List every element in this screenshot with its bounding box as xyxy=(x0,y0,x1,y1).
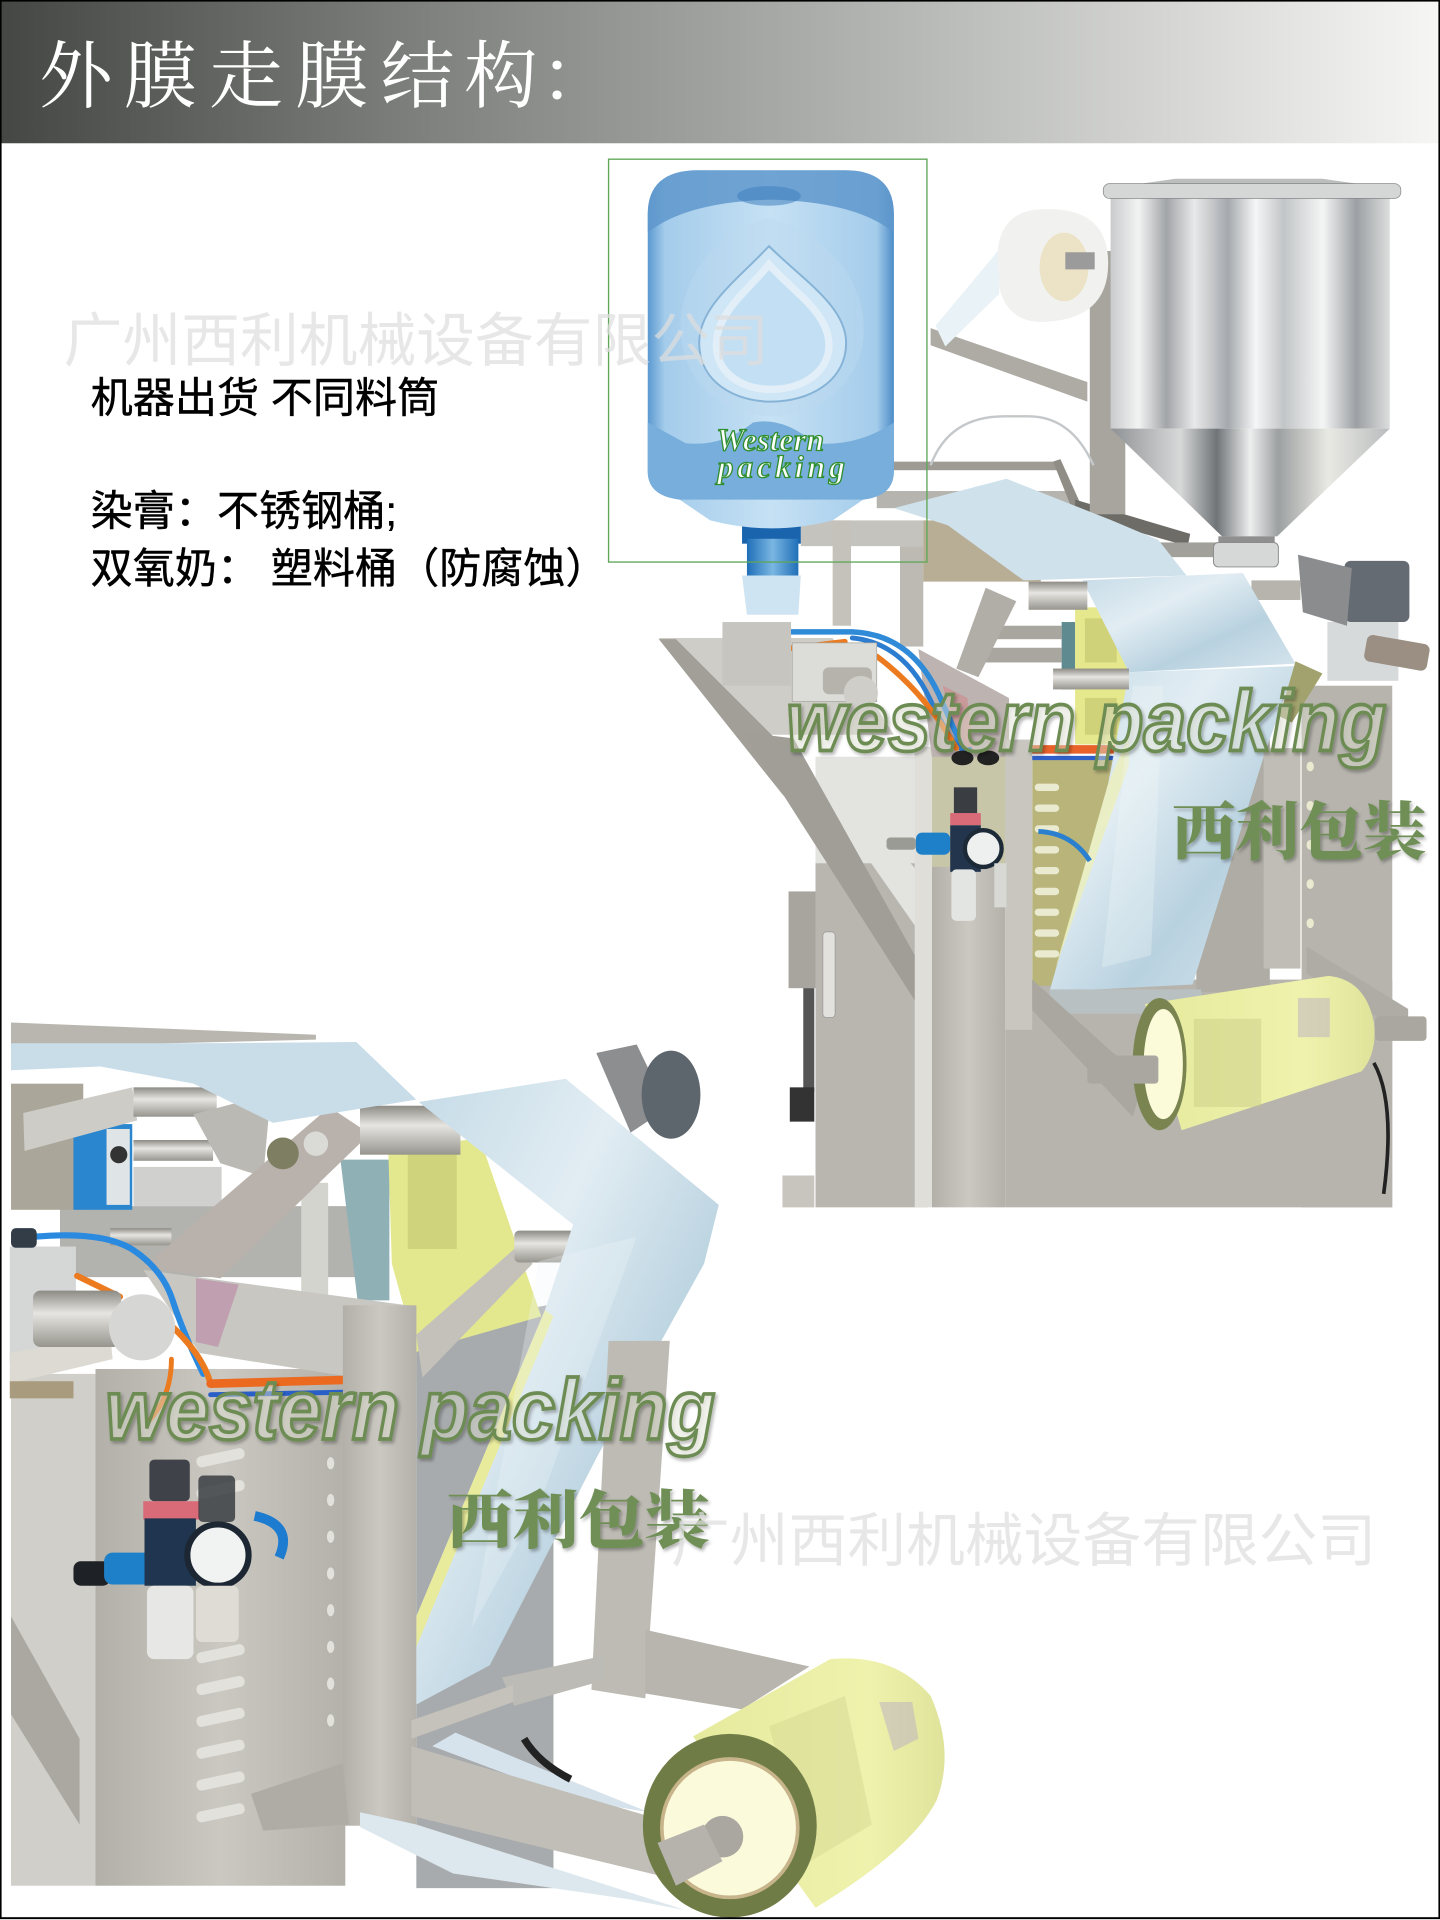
tray arms xyxy=(1032,947,1408,1194)
text block: barrel notes xyxy=(91,375,608,592)
bottle brand text xyxy=(715,423,845,485)
bottle highlight frame xyxy=(609,159,927,562)
printed film roll xyxy=(1087,976,1427,1130)
bottle body xyxy=(648,170,894,528)
watermark: 西利包装 bottom: 西利包装 xyxy=(447,1486,710,1557)
close-up cylinder block xyxy=(10,1247,113,1398)
upper film path frame xyxy=(801,251,1273,689)
top film roll xyxy=(936,209,1108,347)
close-up cabinet panels xyxy=(11,1022,553,1888)
close-up motor xyxy=(596,1044,700,1139)
header banner xyxy=(1,1,1440,143)
strap and rods xyxy=(23,1087,269,1245)
close-up air pipes xyxy=(34,1235,343,1420)
close-up printed roll xyxy=(643,1658,945,1918)
bottle brand text: Western xyxy=(716,423,824,458)
watermark: 西利包装 top: 西利包装 xyxy=(1172,798,1427,869)
note line 3: 双氧奶： 塑料桶（防腐蚀） xyxy=(91,545,608,592)
air pipes xyxy=(765,632,1113,758)
note line 1: 机器出货 不同料筒 xyxy=(91,375,439,422)
timer box xyxy=(73,1124,132,1210)
watermark: western packing bottom: western packing xyxy=(105,1362,715,1458)
bottle lower band xyxy=(648,421,894,500)
filter regulator xyxy=(887,787,1090,921)
black pipe fittings xyxy=(951,751,999,765)
yellow label on film xyxy=(388,1139,541,1352)
close-up plate and roller xyxy=(143,1106,582,1378)
watermark: company name top: 广州西利机械设备有限公司 xyxy=(64,309,769,374)
teal film and slot bracket xyxy=(301,1160,389,1300)
close-up posts and bars xyxy=(251,1305,809,1910)
close-up air cylinder xyxy=(11,1228,175,1360)
panel slots xyxy=(195,1447,334,1823)
machine photo: close-up of film path xyxy=(10,1022,945,1918)
water bottle barrel xyxy=(648,170,894,615)
bottle top dark spot xyxy=(737,186,801,206)
watermark: company name bottom: 广州西利机械设备有限公司 xyxy=(671,1509,1376,1574)
watermark: western packing top: western packing xyxy=(786,674,1386,770)
teardrop emblem xyxy=(680,218,864,416)
close-up film web xyxy=(11,1042,719,1704)
close-up horizontal bar xyxy=(143,1270,416,1387)
bottle top band xyxy=(648,170,894,233)
air cylinder unit on table xyxy=(722,622,878,710)
panel slots and perforations xyxy=(1035,762,1314,966)
note line 2: 染膏：不锈钢桶; xyxy=(91,487,397,534)
machine photo: full machine xyxy=(659,179,1431,1207)
bottle brand text: packing xyxy=(715,450,845,485)
motor and right mount xyxy=(1251,555,1431,681)
close-up filter regulator xyxy=(73,1460,283,1659)
left and right posts xyxy=(1005,740,1300,1030)
bottle neck xyxy=(742,524,801,615)
table and diagonal strut xyxy=(659,638,1009,1000)
yellow label strip xyxy=(1075,607,1129,744)
rollers and arm xyxy=(956,582,1322,722)
hopper xyxy=(1103,179,1401,567)
title: 外膜走膜结构： xyxy=(39,37,613,118)
cabinet body xyxy=(782,686,1392,1207)
film web xyxy=(894,479,1296,992)
